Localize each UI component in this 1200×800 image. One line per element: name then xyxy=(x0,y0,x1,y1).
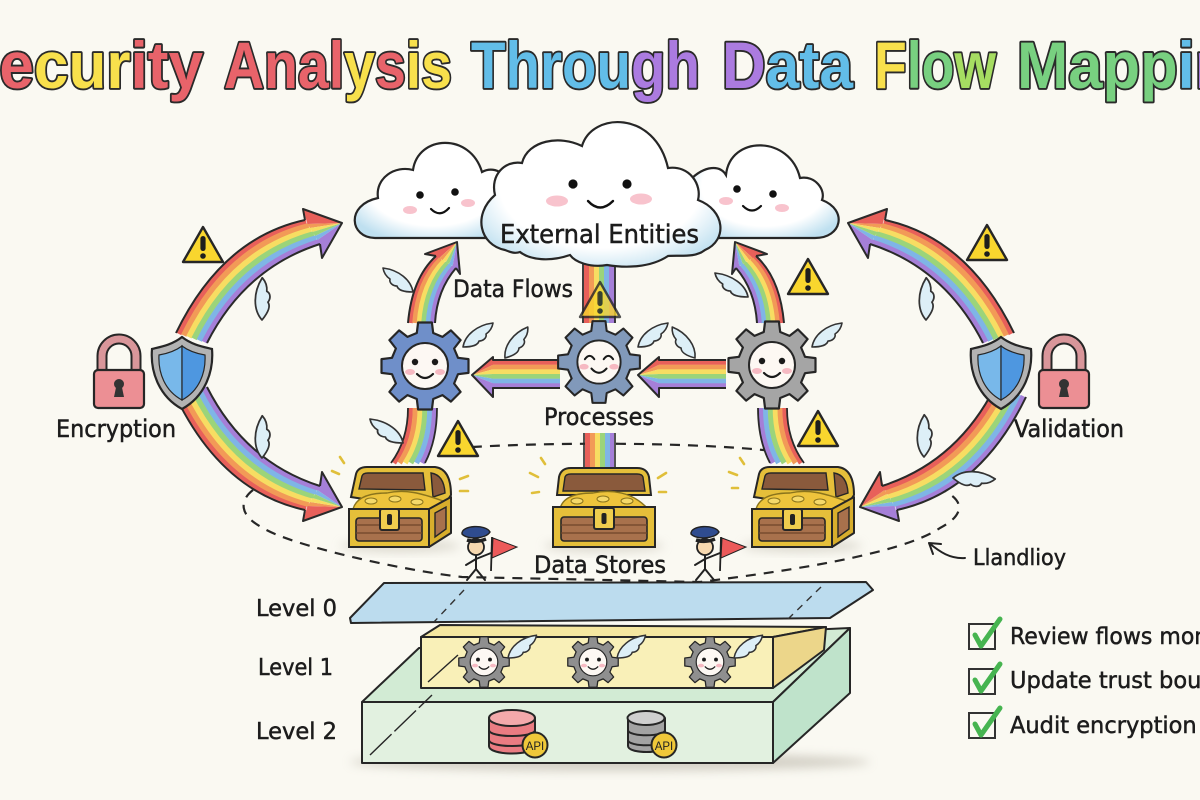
label: Level 0: Level 0 xyxy=(256,596,337,622)
gear: left process xyxy=(382,322,468,410)
database: red xyxy=(489,710,535,754)
arrow: centre gear to centre chest xyxy=(584,433,615,467)
wings on flows and gears xyxy=(241,268,995,499)
arrow: right gear to chest xyxy=(758,408,804,463)
guard: left with flag xyxy=(462,527,517,580)
label: boundary callout xyxy=(929,543,1066,571)
level 2 green layer xyxy=(362,628,850,763)
arrow: encryption flow to cloud xyxy=(176,209,342,343)
gear: right process xyxy=(728,322,816,408)
level 0 blue layer xyxy=(350,582,873,623)
warning icons xyxy=(183,225,1007,456)
small gear: second xyxy=(568,635,646,687)
label: boundary callout: Llandlioy xyxy=(973,546,1066,571)
trust boundary dashed line xyxy=(244,444,959,582)
arrow: left gear to cloud xyxy=(408,242,460,323)
small gear: third xyxy=(685,635,762,687)
label: External Entities: External Entities xyxy=(500,220,699,250)
check item: audit encryption xyxy=(969,708,1200,739)
arrow: left gear to chest xyxy=(391,408,437,463)
title xyxy=(0,28,1200,102)
padlock: right xyxy=(1039,339,1089,408)
label: Data Flows: Data Flows xyxy=(453,275,573,303)
API badge: grey database: API xyxy=(655,741,673,753)
API badge: red database xyxy=(522,732,548,758)
guard: right with flag xyxy=(691,527,746,580)
chest: centre data store xyxy=(553,468,655,547)
stack shadow xyxy=(350,753,870,771)
title: Flow xyxy=(874,28,997,102)
shield: left xyxy=(152,337,212,409)
arrow: cloud to centre gear xyxy=(583,255,615,323)
arrow: validation flow to data store xyxy=(860,387,1026,521)
label: Validation: Validation xyxy=(1014,415,1124,443)
label: Processes: Processes xyxy=(544,403,654,431)
label: Level 2: Level 2 xyxy=(256,719,337,745)
padlock: left xyxy=(94,339,144,408)
chest shadows xyxy=(340,540,862,552)
API badge: red database: API xyxy=(526,741,544,753)
arrow: centre gear to left gear xyxy=(472,357,560,397)
title: Through xyxy=(471,28,700,102)
title: Analysis xyxy=(224,28,452,102)
arrow: right gear to cloud xyxy=(732,242,784,323)
level 1 yellow layer xyxy=(421,625,826,688)
chest sparkles xyxy=(332,457,744,493)
database: grey xyxy=(628,711,665,752)
checklist xyxy=(969,619,1200,739)
gear: centre process xyxy=(558,321,640,403)
arrow: right gear to centre gear xyxy=(638,357,726,397)
arrow: encryption flow to data store xyxy=(176,387,342,521)
arrow: validation flow to cloud xyxy=(848,209,1014,343)
shield: right xyxy=(971,337,1031,409)
label: Data Stores: Data Stores xyxy=(534,551,666,579)
label: Encryption: Encryption xyxy=(56,415,176,443)
check item: review flows xyxy=(969,619,1200,650)
title: Data xyxy=(722,28,854,102)
label: Level 1: Level 1 xyxy=(258,655,333,681)
chest: right data store xyxy=(752,467,854,547)
small gear: first xyxy=(459,635,536,687)
cloud: left xyxy=(355,143,512,238)
chest: left data store xyxy=(349,467,451,547)
cloud: right xyxy=(690,145,839,238)
API badge: grey database xyxy=(652,732,676,758)
cloud: centre xyxy=(481,122,720,267)
